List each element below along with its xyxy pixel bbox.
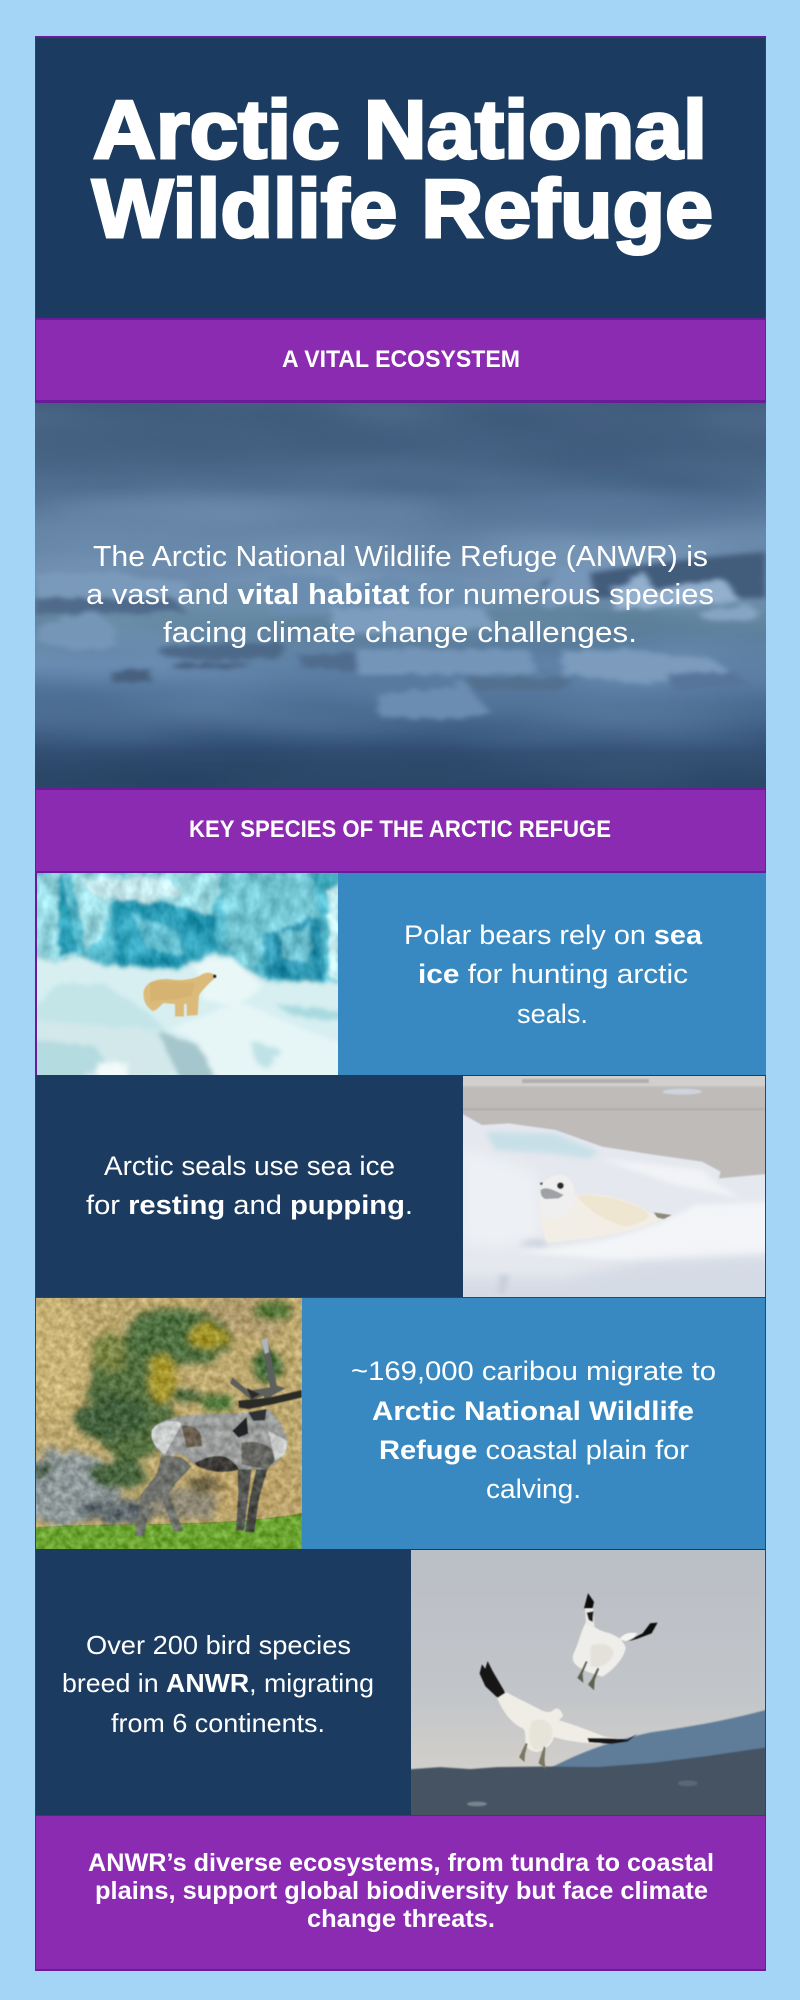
panel: birds row — [36, 1549, 774, 1822]
panel: arctic seal row — [36, 1075, 781, 1315]
species text: caribou: ~169,000 caribou migrate to — [351, 1356, 716, 1386]
species text: caribou: Refuge coastal plain for — [379, 1435, 689, 1465]
icon: upper goose — [573, 1593, 658, 1690]
photo: icebergs under cloudy sky — [35, 403, 766, 788]
species text: polar bears: seals. — [517, 999, 588, 1029]
closing banner — [36, 1816, 765, 1969]
species text: birds: from 6 continents. — [111, 1708, 325, 1738]
intro text — [86, 541, 714, 649]
icon: caribou — [135, 1338, 302, 1536]
species text: arctic seals — [86, 1151, 413, 1220]
photo: snow geese in flight — [411, 1550, 765, 1815]
closing banner: plains, support global biodiversity but face climate — [95, 1877, 708, 1905]
intro text: a vast and vital habitat for numerous species — [86, 579, 714, 611]
species text: polar bears: Polar bears rely on sea — [404, 920, 703, 950]
title panel — [36, 38, 765, 318]
section banner: a vital ecosystem: A VITAL ECOSYSTEM — [282, 346, 520, 373]
intro text: The Arctic National Wildlife Refuge (ANWR) is — [93, 541, 708, 573]
species text: arctic seals: Arctic seals use sea ice — [104, 1151, 395, 1181]
section banner: key species: KEY SPECIES OF THE ARCTIC REFUGE — [189, 816, 611, 843]
species text: birds: breed in ANWR, migrating — [62, 1668, 374, 1698]
section banner: key species — [36, 790, 765, 871]
closing banner: ANWR’s diverse ecosystems, from tundra to coastal — [88, 1849, 714, 1877]
photo: seal on snow — [463, 1076, 765, 1297]
species text: birds — [62, 1630, 374, 1738]
species text: arctic seals: for resting and pupping . — [86, 1190, 413, 1220]
panel: hero photo of icebergs with intro text — [0, 403, 800, 800]
icon: lower goose — [480, 1661, 638, 1769]
species text: polar bears — [404, 920, 703, 1029]
species text: caribou: calving. — [486, 1474, 581, 1504]
title: Arctic National — [93, 83, 707, 176]
panel: caribou row — [8, 1290, 765, 1555]
photo: caribou on tundra — [36, 1298, 302, 1549]
icon: seal — [539, 1175, 672, 1242]
section banner: a vital ecosystem — [36, 320, 765, 400]
photo: polar bear on sea ice — [37, 873, 338, 1075]
intro text: facing climate change challenges. — [163, 617, 637, 649]
species text: birds: Over 200 bird species — [86, 1630, 351, 1660]
species text: caribou: Arctic National Wildlife — [372, 1396, 694, 1426]
species text: polar bears: ice for hunting arctic — [418, 959, 688, 989]
title: Wildlife Refuge — [92, 162, 713, 255]
icon: polar bear — [143, 973, 217, 1016]
closing banner: change threats. — [307, 1905, 495, 1933]
panel: polar bear row — [25, 872, 766, 1086]
title — [92, 83, 713, 255]
species text: caribou — [351, 1356, 716, 1504]
